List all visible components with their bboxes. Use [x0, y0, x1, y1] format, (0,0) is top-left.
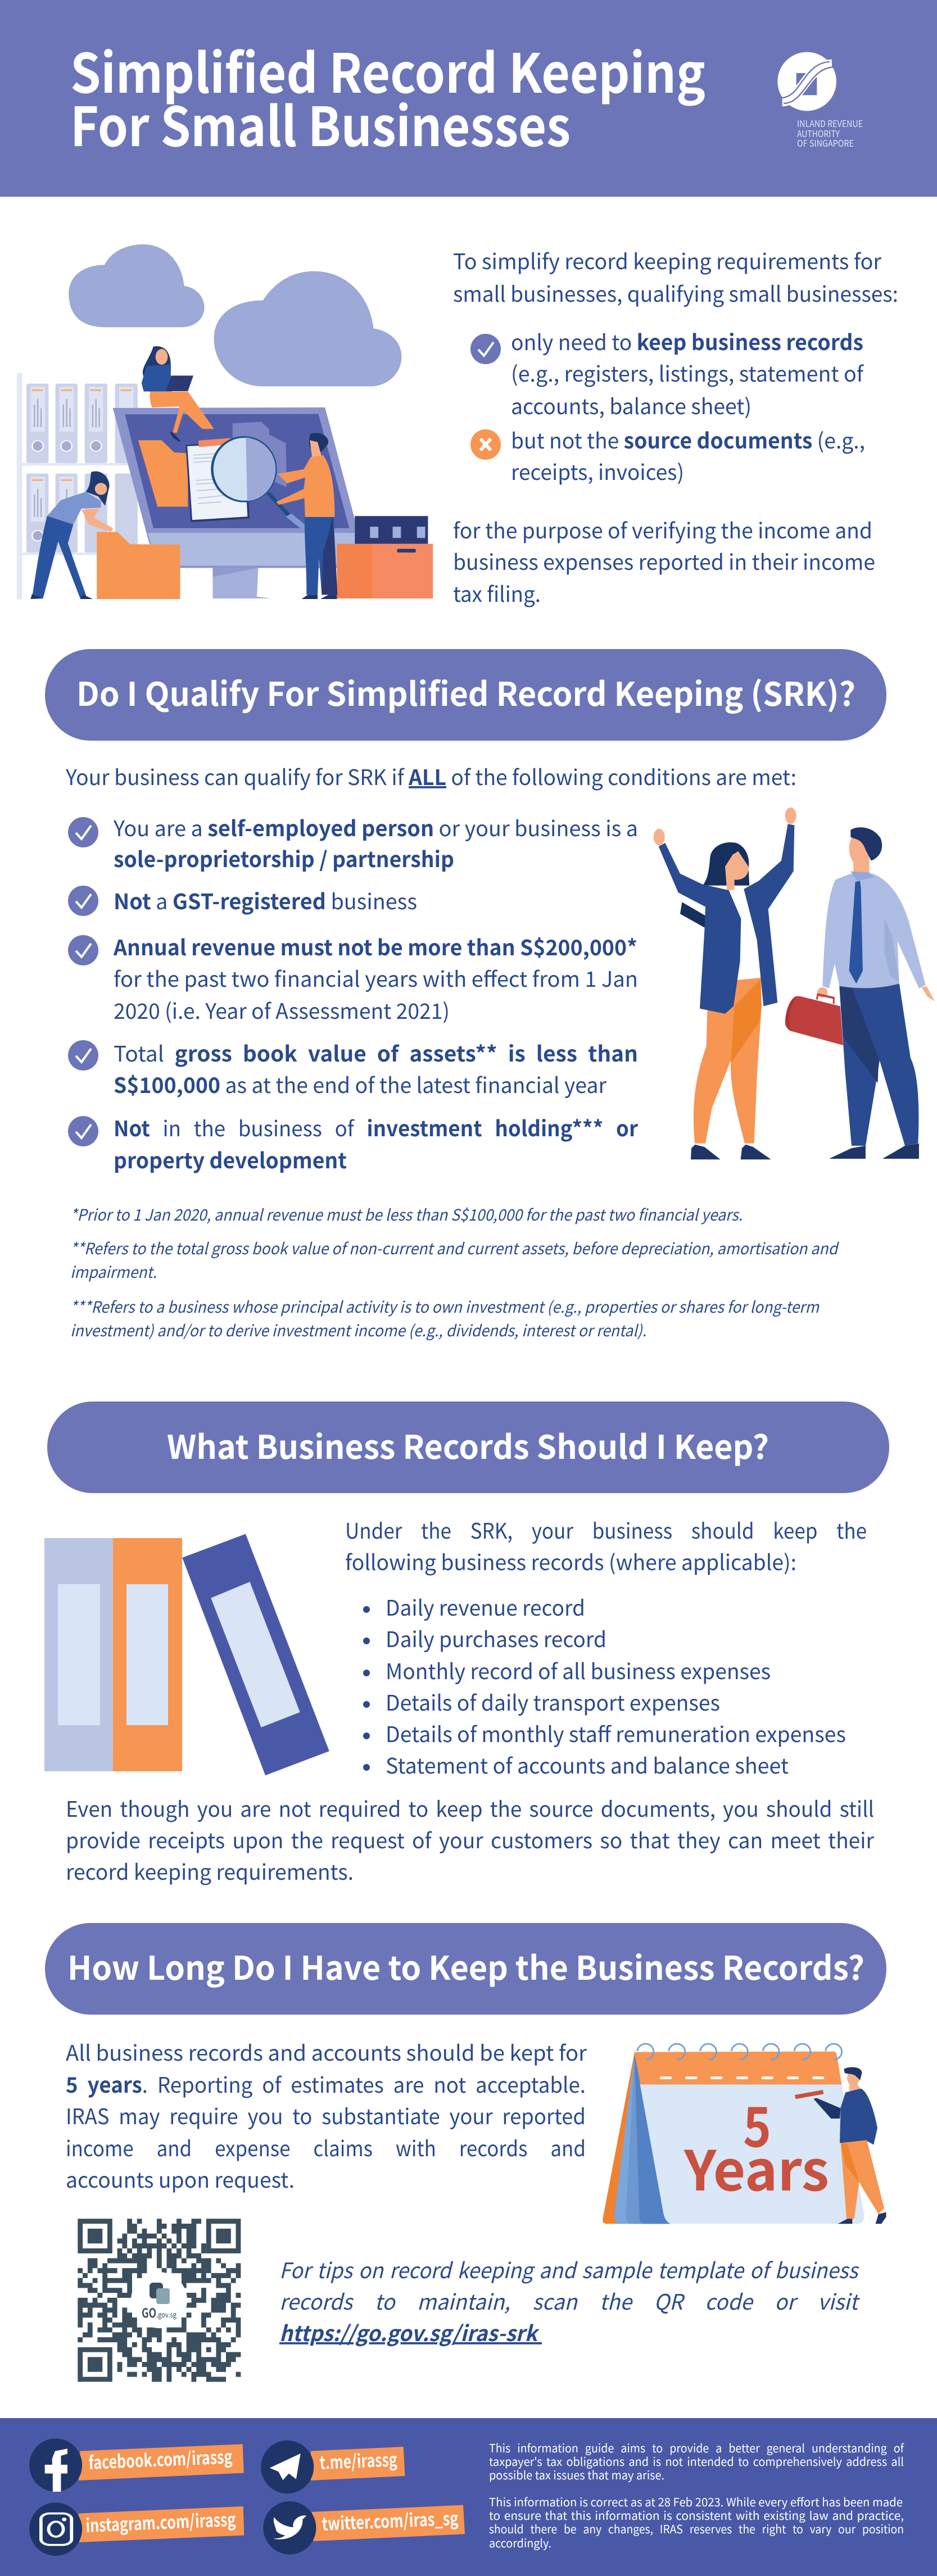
- records intro: Under the SRK, your business should keep the: [345, 1514, 867, 1545]
- footer band: [0, 2418, 937, 2576]
- retention paragraph: All business records and accounts should be kept for: [66, 2036, 587, 2067]
- illustration: calendar with 5 Years: [603, 2044, 886, 2224]
- disclaimer: [489, 2439, 904, 2551]
- intro text: To simplify record keeping requirements for: [453, 244, 881, 275]
- list of records: Details of monthly staff remuneration expenses: [386, 1717, 846, 1748]
- condition: not GST-registered: Not a GST-registered business: [114, 885, 417, 915]
- list of records: Statement of accounts and balance sheet: [386, 1749, 789, 1780]
- condition: gross book value: Total gross book value of assets** is less than: [114, 1037, 638, 1068]
- disclaimer: possible tax issues that may arise.: [489, 2466, 664, 2483]
- retention paragraph: income and expense claims with records and: [66, 2131, 586, 2162]
- illustration: calendar with 5 Years: 5: [743, 2083, 771, 2163]
- icon: IRAS logo: AUTHORITY: [797, 126, 840, 140]
- condition: self-employed: sole-proprietorship / partnership: [114, 842, 454, 873]
- footnotes: investment) and/or to derive investment income (e.g., dividends, interest or rental).: [70, 1319, 646, 1341]
- folder in front: [97, 532, 180, 599]
- list item: keep business records: only need to keep business records: [511, 325, 863, 356]
- list item: not the source documents: receipts, invoices): [511, 455, 684, 486]
- panel: qualification: [45, 649, 935, 1341]
- person: man with magnifier: [309, 433, 328, 452]
- clipboard: [185, 442, 250, 522]
- illustration: calendar with 5 Years: Years: [683, 2127, 829, 2207]
- social: twitter: twitter.com/iras_sg: [321, 2505, 459, 2536]
- footnotes: **Refers to the total gross book value of non-current and current assets, before depreciation, amortisation and: [70, 1237, 839, 1259]
- icon: IRAS logo: [777, 52, 863, 149]
- heading: Do I Qualify: [45, 649, 886, 741]
- social: facebook: facebook.com/irassg: [88, 2443, 233, 2475]
- woman: [703, 842, 749, 886]
- tips text: records to maintain, scan the QR code or visit: [279, 2285, 861, 2316]
- list item: keep business records: [511, 325, 864, 420]
- condition: gross book value: [114, 1037, 638, 1099]
- title: [70, 30, 705, 162]
- list of records: Daily revenue record: [386, 1591, 585, 1622]
- disclaimer: to ensure that this information is consistent with existing law and practice,: [489, 2506, 904, 2523]
- retention paragraph: accounts upon request.: [66, 2163, 295, 2194]
- person: woman lifting folder: [86, 471, 110, 506]
- records intro: [345, 1514, 867, 1576]
- social: twitter: [263, 2501, 465, 2555]
- QR code: GO.gov.sg: [142, 2303, 176, 2321]
- man: [849, 832, 871, 865]
- closing paragraph: business expenses reported in their income: [453, 545, 875, 576]
- disclaimer: This information guide aims to provide a better general understanding of: [489, 2439, 904, 2456]
- retention paragraph: IRAS may require you to substantiate your reported: [66, 2099, 586, 2130]
- disclaimer: taxpayer's tax obligations and is not intended to comprehensively address all: [489, 2452, 904, 2469]
- social: instagram: instagram.com/irassg: [85, 2506, 236, 2538]
- receipts note: Even though you are not required to keep the source documents, you should still: [66, 1792, 874, 1823]
- receipts note: [66, 1792, 874, 1886]
- icon: IRAS logo: INLAND REVENUE: [797, 116, 863, 130]
- monitor: [113, 407, 366, 568]
- footnotes: [70, 1203, 839, 1341]
- tips text: For tips on record keeping and sample template of business: [279, 2253, 859, 2284]
- list of records: Monthly record of all business expenses: [386, 1654, 771, 1685]
- folder on screen: [138, 440, 188, 507]
- condition: investment holding: [114, 1112, 638, 1174]
- closing paragraph: tax filing.: [453, 577, 541, 608]
- icon: IRAS logo: OF SINGAPORE: [797, 136, 854, 149]
- condition: self-employed: You are a self-employed person or your business is a: [113, 811, 638, 842]
- condition: self-employed: [113, 811, 638, 873]
- disclaimer: This information is correct as at 28 Feb 2023. While every effort has been made: [489, 2493, 903, 2510]
- condition: annual revenue: Annual revenue must not be more than S$200,000*: [113, 931, 637, 962]
- social: telegram: t.me/irassg: [319, 2446, 397, 2475]
- illustration: clouds: [69, 244, 401, 386]
- tips text: [279, 2253, 861, 2347]
- social: facebook: [29, 2438, 244, 2492]
- list item: keep business records: (e.g., registers, listings, statement of: [511, 357, 864, 388]
- title: Simplified Record Keeping: [70, 30, 705, 108]
- QR code: [78, 2219, 241, 2382]
- heading: What Business Records: [47, 1402, 889, 1493]
- magnifier: [212, 437, 275, 501]
- condition: annual revenue: for the past two financial years with effect from 1 Jan: [114, 962, 638, 993]
- heading: How Long: [45, 1923, 886, 2015]
- receipts note: record keeping requirements.: [66, 1855, 354, 1886]
- list of records: Details of daily transport expenses: [386, 1686, 720, 1717]
- icon: cross mark: [470, 429, 501, 460]
- list item: not the source documents: but not the source documents (e.g.,: [511, 424, 865, 455]
- list of records: [363, 1591, 846, 1780]
- list of records: Daily purchases record: [386, 1622, 606, 1653]
- illustration: office team at a monitor with folders: [17, 346, 433, 600]
- person: woman with laptop: [143, 346, 171, 377]
- icon: check mark: [470, 334, 501, 364]
- footnotes: ***Refers to a business whose principal activity is to own investment (e.g., properties or shares for long-term: [70, 1295, 820, 1318]
- illustration: binders: [44, 1534, 329, 1775]
- condition: annual revenue: [113, 931, 638, 1025]
- panel: business records: [44, 1402, 889, 1886]
- disclaimer: should there be any changes, IRAS reserves the right to vary our position: [489, 2520, 904, 2537]
- tips text: https://go.gov.sg/iras-srk: [279, 2316, 542, 2347]
- footnotes: impairment.: [70, 1260, 157, 1283]
- closing paragraph: [453, 514, 875, 608]
- condition: gross book value: S$100,000 as at the end of the latest financial year: [114, 1068, 606, 1099]
- heading: What Business Records: What Business Records Should I Keep?: [167, 1421, 769, 1468]
- panel: retention period: [45, 1923, 886, 2382]
- lead sentence: Your business can qualify for SRK if ALL of the following conditions are met:: [65, 760, 796, 791]
- retention paragraph: 5 years. Reporting of estimates are not acceptable.: [66, 2068, 586, 2099]
- intro text: small businesses, qualifying small businesses:: [453, 277, 898, 308]
- footnotes: *Prior to 1 Jan 2020, annual revenue must be less than S$100,000 for the past two financial years.: [70, 1203, 743, 1226]
- receipts note: provide receipts upon the request of your customers so that they can meet their: [66, 1824, 874, 1854]
- list item: not the source documents: [511, 424, 865, 486]
- retention paragraph: [66, 2036, 587, 2194]
- illustration: two business people: [654, 808, 935, 1159]
- box and binders: [355, 516, 428, 544]
- records intro: following business records (where applicable):: [345, 1545, 796, 1576]
- check icons: [68, 817, 98, 1146]
- heading: How Long: How Long Do I Have to Keep the Business Records?: [67, 1942, 864, 1989]
- disclaimer: accordingly.: [489, 2534, 551, 2551]
- condition: investment holding: property development: [114, 1144, 347, 1174]
- heading: Do I Qualify: Do I Qualify For Simplified Record Keeping (SRK)?: [76, 668, 855, 715]
- social: telegram: [261, 2441, 405, 2493]
- header band: [0, 0, 937, 197]
- closing paragraph: for the purpose of verifying the income and: [453, 514, 872, 545]
- condition: investment holding: Not in the business of investment holding*** or: [114, 1112, 638, 1142]
- intro text: [453, 244, 898, 308]
- title: For Small Businesses: [70, 84, 571, 162]
- condition: annual revenue: 2020 (i.e. Year of Assessment 2021): [114, 994, 450, 1025]
- list item: keep business records: accounts, balance sheet): [511, 389, 752, 420]
- social: instagram: [29, 2502, 244, 2556]
- panel: introduction: [17, 244, 898, 608]
